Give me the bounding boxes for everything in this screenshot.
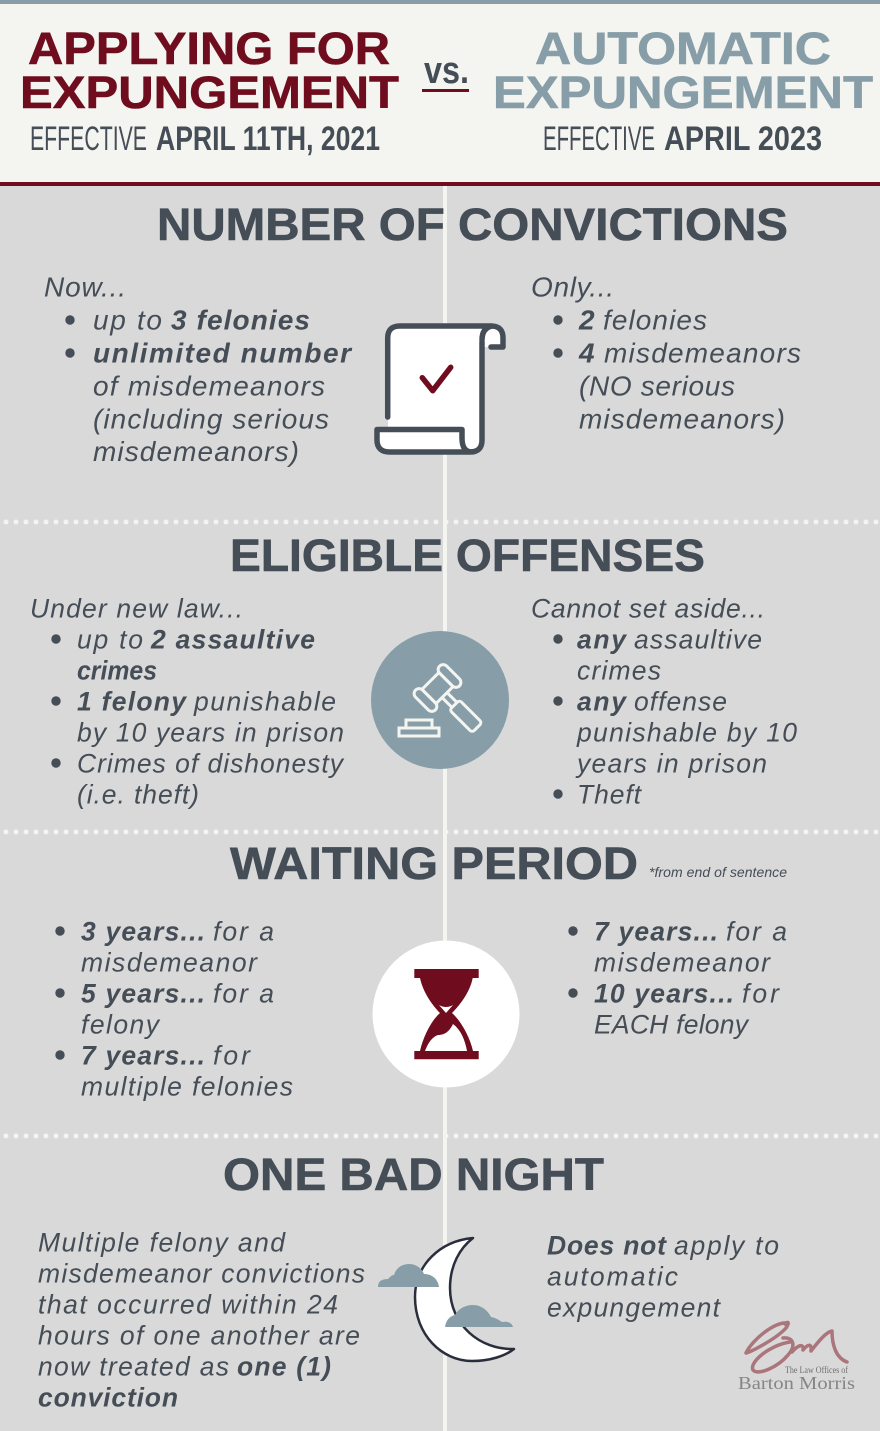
text: left waiting period: for bbox=[213, 1040, 251, 1070]
text: right convictions: (NO serious bbox=[579, 370, 735, 402]
text: right one bad night bbox=[547, 1230, 779, 1322]
text: right offenses: punishable by 10 bbox=[576, 718, 797, 748]
logo: barton morris: The Law Offices of bbox=[785, 1365, 848, 1375]
text: left one bad night: that occurred within 24 bbox=[38, 1290, 338, 1320]
text: left offenses: 1 felony bbox=[77, 686, 187, 716]
text: left convictions bbox=[44, 272, 353, 467]
text: left waiting period: multiple felonies bbox=[81, 1072, 293, 1102]
logo: barton morris bbox=[738, 1322, 855, 1393]
text: right convictions: misdemeanors) bbox=[579, 404, 785, 434]
text: left convictions: unlimited number bbox=[93, 338, 353, 368]
text: left offenses: 2 assaultive bbox=[150, 624, 315, 654]
title: automatic expungement: EXPUNGEMENT bbox=[493, 67, 873, 118]
text: left waiting period: for a bbox=[213, 916, 274, 946]
text: left convictions: of misdemeanors bbox=[93, 370, 325, 402]
text: right convictions: 4 bbox=[578, 338, 595, 368]
subtitle: effective april 11th 2021: APRIL 11TH, 2021 bbox=[156, 120, 380, 158]
text: left convictions: misdemeanors) bbox=[93, 436, 299, 467]
text: left convictions: 3 felonies bbox=[171, 304, 310, 336]
text: right waiting period: for bbox=[742, 978, 780, 1008]
icon: scroll with check bbox=[377, 326, 503, 452]
text: right offenses: offense bbox=[634, 686, 727, 716]
title: applying for expungement bbox=[20, 23, 399, 118]
icon: crescent moon and clouds bbox=[378, 1238, 514, 1361]
subtitle: effective april 11th 2021: EFFECTIVE bbox=[30, 120, 147, 158]
title: applying for expungement: APPLYING FOR bbox=[28, 23, 390, 74]
text: left one bad night: one (1) bbox=[237, 1352, 331, 1382]
text: right offenses: years in prison bbox=[575, 748, 767, 778]
text: left one bad night: misdemeanor convictions bbox=[38, 1258, 365, 1288]
text: right offenses: any bbox=[577, 686, 627, 716]
text: right waiting period: EACH felony bbox=[594, 1010, 750, 1040]
heading: eligible offenses: ELIGIBLE OFFENSES bbox=[230, 530, 705, 581]
text: right convictions bbox=[531, 272, 801, 434]
text: left offenses: punishable bbox=[193, 686, 336, 716]
text: right offenses: assaultive bbox=[634, 624, 762, 654]
subtitle: effective april 11th 2021 bbox=[30, 120, 380, 158]
text: right offenses: Theft bbox=[577, 780, 643, 810]
text: right waiting period: misdemeanor bbox=[594, 948, 771, 978]
text: left offenses: crimes bbox=[77, 656, 157, 686]
text: right waiting period bbox=[568, 916, 787, 1040]
text: right offenses: Cannot set aside... bbox=[531, 594, 765, 624]
text: left one bad night: now treated as bbox=[38, 1352, 229, 1382]
text: right convictions: Only... bbox=[531, 272, 614, 302]
icon: hourglass in circle bbox=[372, 940, 520, 1088]
title: automatic expungement: AUTOMATIC bbox=[535, 23, 831, 74]
heading: waiting period: WAITING PERIOD bbox=[230, 838, 638, 889]
footnote: from end of sentence: *from end of sentence bbox=[649, 864, 787, 880]
text: left offenses bbox=[30, 594, 345, 810]
text: left waiting period: felony bbox=[81, 1010, 161, 1040]
text: right one bad night: automatic bbox=[547, 1262, 678, 1292]
text: left waiting period: for a bbox=[213, 978, 274, 1008]
text: left offenses: Crimes of dishonesty bbox=[77, 748, 345, 778]
text: left one bad night: conviction bbox=[38, 1382, 178, 1412]
text: right offenses: any bbox=[577, 624, 627, 654]
text: left waiting period bbox=[55, 916, 293, 1102]
text: right one bad night: apply to bbox=[674, 1230, 779, 1260]
text: right offenses: crimes bbox=[577, 656, 661, 686]
text: left convictions: (including serious bbox=[93, 404, 329, 434]
text: right convictions: misdemeanors bbox=[604, 338, 801, 368]
text: left one bad night: Multiple felony and bbox=[38, 1228, 286, 1258]
text: left offenses: (i.e. theft) bbox=[77, 780, 199, 810]
title: applying for expungement: EXPUNGEMENT bbox=[20, 67, 399, 118]
text: left convictions: Now... bbox=[44, 272, 126, 302]
subtitle: effective april 2023: EFFECTIVE bbox=[543, 120, 655, 158]
logo: barton morris: Barton Morris bbox=[738, 1373, 855, 1393]
text: left waiting period: 7 years... bbox=[81, 1040, 205, 1070]
text: right waiting period: 10 years... bbox=[594, 978, 734, 1008]
text: right waiting period: for a bbox=[726, 916, 787, 946]
text: left one bad night: hours of one another are bbox=[38, 1320, 360, 1350]
text: left offenses: by 10 years in prison bbox=[77, 718, 344, 748]
text: left convictions: up to bbox=[93, 304, 162, 336]
heading: number of convictions: NUMBER OF CONVICTIONS bbox=[157, 199, 788, 250]
text: right one bad night: expungement bbox=[547, 1292, 722, 1322]
text: left one bad night bbox=[38, 1228, 365, 1412]
text: left offenses: up to bbox=[77, 624, 143, 654]
text: right convictions: 2 bbox=[578, 304, 595, 336]
vs divider: vs. bbox=[424, 50, 469, 92]
text: left waiting period: 5 years... bbox=[81, 978, 205, 1008]
subtitle: effective april 2023: APRIL 2023 bbox=[664, 120, 822, 158]
icon: gavel in circle bbox=[371, 631, 509, 769]
text: right offenses bbox=[531, 594, 797, 810]
header banner bbox=[0, 0, 880, 186]
heading: one bad night: ONE BAD NIGHT bbox=[223, 1149, 604, 1200]
text: left waiting period: 3 years... bbox=[81, 916, 205, 946]
text: right convictions: felonies bbox=[603, 304, 707, 336]
subtitle: effective april 2023 bbox=[543, 120, 822, 158]
title: automatic expungement bbox=[493, 23, 873, 118]
text: left waiting period: misdemeanor bbox=[81, 948, 258, 978]
text: right one bad night: Does not bbox=[547, 1230, 667, 1260]
text: right waiting period: 7 years... bbox=[594, 916, 718, 946]
text: left offenses: Under new law... bbox=[30, 594, 243, 624]
